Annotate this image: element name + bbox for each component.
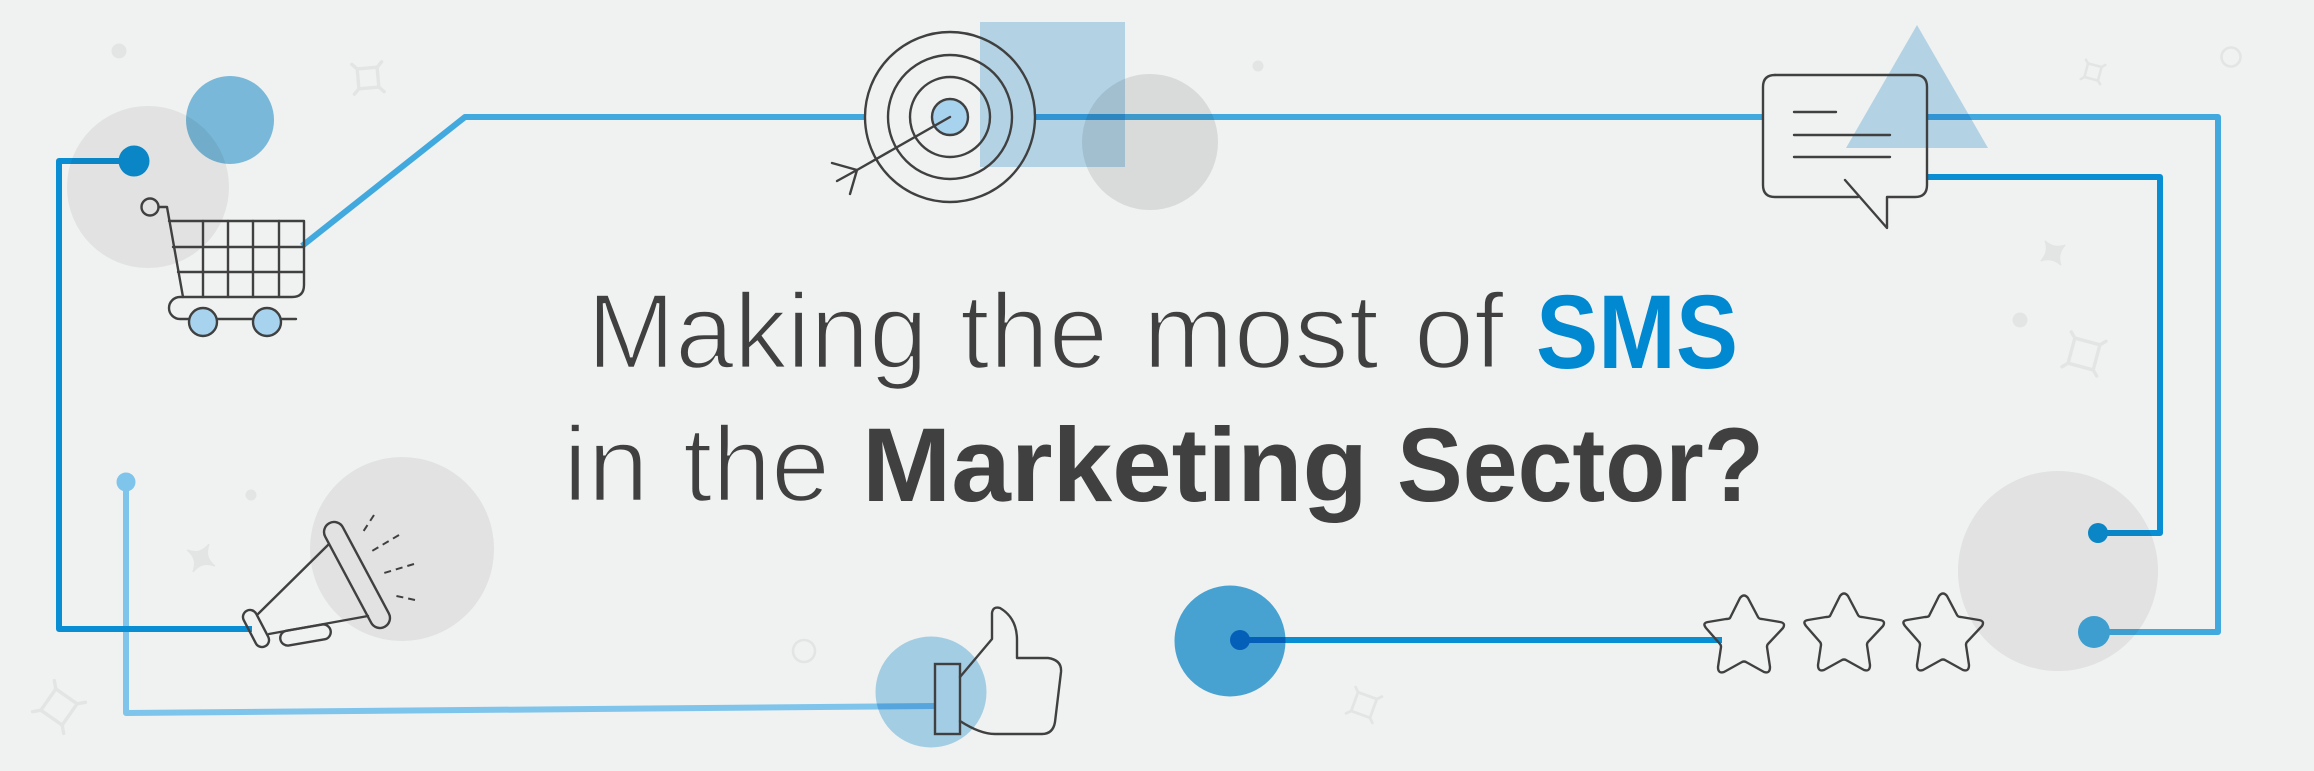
title line 1 (587, 271, 1738, 391)
icon: thumbs up (935, 608, 1061, 734)
connector: pale blue line to thumbs up (116, 472, 935, 713)
icon: three stars (1704, 594, 1983, 672)
title line 2 (563, 404, 1764, 524)
title line 1: most (1143, 271, 1379, 391)
title line 1: of (1414, 271, 1504, 391)
title line 2: in (563, 404, 649, 524)
title (563, 271, 1764, 524)
title line 2: the (683, 404, 830, 524)
title line 2: Marketing (862, 407, 1368, 524)
icon: target with arrow (832, 32, 1035, 202)
connector: light blue top line (302, 117, 2218, 648)
title line 1: Making (587, 271, 928, 391)
connector: dark blue lines (59, 146, 2160, 650)
icon: shopping cart (142, 198, 304, 336)
title line 1: SMS (1536, 274, 1738, 391)
icon: speech bubble (1763, 75, 1927, 228)
title line 1: the (960, 271, 1108, 391)
title line 2: Sector? (1397, 407, 1764, 524)
icon: megaphone (241, 515, 415, 649)
